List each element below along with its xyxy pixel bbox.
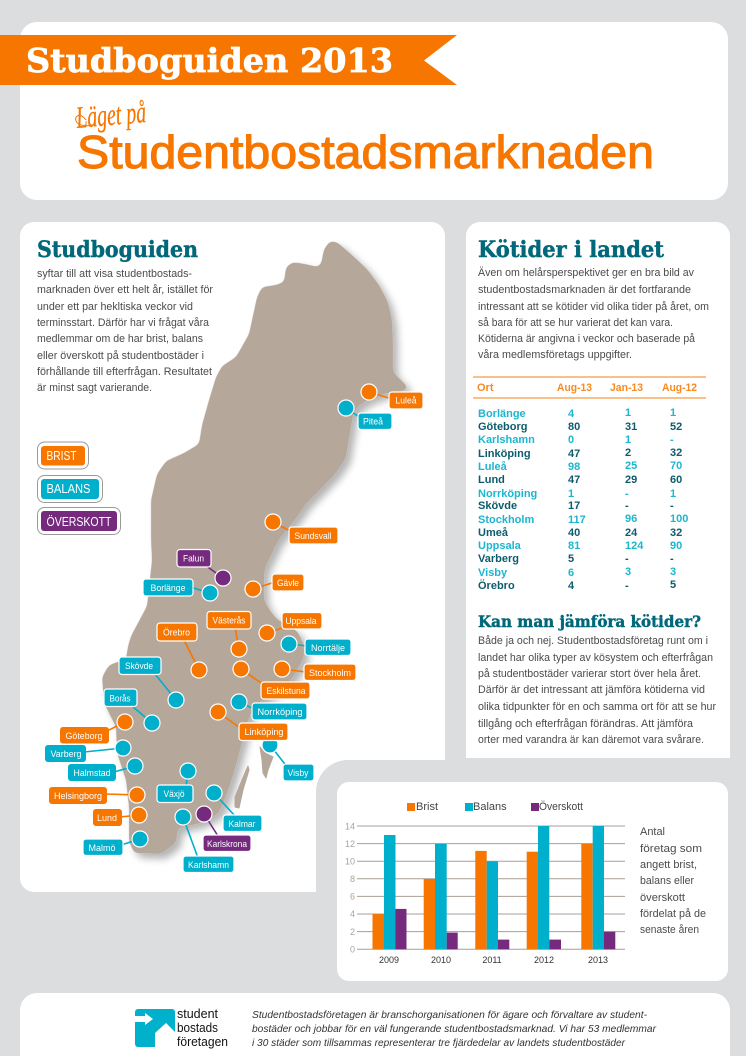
city: Helsingborg: Helsingborg — [54, 791, 102, 802]
footer text: bostäder och jobbar för en väl fungerande studentbostadsmarknad. Vi har 53 medlemmar — [252, 1023, 656, 1035]
city: Varberg — [45, 740, 131, 762]
row: Visby — [478, 566, 676, 579]
city: Västerås — [207, 612, 251, 657]
row: Linköping — [478, 447, 682, 460]
bars: 2013 — [581, 826, 615, 965]
city: Stockholm: Stockholm — [309, 668, 351, 679]
row: Umeå: 24 — [625, 527, 638, 539]
city: Gävle: Gävle — [277, 578, 299, 589]
intro text: Kötiderna är angivna i veckor och baserade på — [478, 333, 696, 345]
row: Karlshamn: - — [670, 434, 674, 446]
row: Lund: 29 — [625, 474, 637, 486]
bars: 2010: 2010 — [431, 955, 451, 965]
row: Varberg: Varberg — [478, 553, 519, 565]
row: Varberg: 5 — [568, 553, 574, 565]
chart caption: Antal — [640, 826, 665, 838]
row: Borlänge: 1 — [670, 407, 676, 419]
row: Visby: 6 — [568, 567, 574, 579]
bars: 2013: 2013 — [588, 955, 608, 965]
intro text: är minst sagt varierande. — [37, 382, 152, 394]
intro text: intressant att se kötider vid olika tider på året, om — [478, 301, 709, 313]
row: Stockholm: 96 — [625, 513, 637, 525]
city: Piteå — [338, 400, 392, 430]
row: Lund — [478, 474, 682, 486]
row: Norrköping: - — [625, 488, 629, 500]
city: Falun: Falun — [183, 554, 204, 564]
row: Umeå — [478, 527, 682, 539]
row: Karlshamn: 1 — [625, 434, 631, 446]
panel: chart — [316, 760, 746, 981]
legend: brist: BRIST — [46, 448, 77, 463]
row: Linköping: 2 — [625, 447, 631, 459]
y axis grid: 10 — [345, 856, 355, 866]
row: Varberg: - — [625, 553, 629, 565]
table header — [477, 382, 697, 394]
city: Linköping: Linköping — [244, 727, 284, 738]
row: Göteborg: Göteborg — [478, 421, 528, 433]
city: Halmstad: Halmstad — [74, 768, 110, 779]
row: Uppsala: 90 — [670, 540, 682, 552]
row: Luleå: 70 — [670, 460, 682, 472]
city: Karlshamn — [175, 809, 234, 872]
city: Skövde — [119, 657, 184, 708]
ribbon — [0, 35, 457, 85]
city: Borås — [104, 689, 160, 731]
comparison text: Därför är det intressant att jämföra kötiderna vid — [478, 684, 705, 696]
row: Umeå: 32 — [670, 527, 682, 539]
comparison text: landet har olika typer av kösystem och efterfrågan — [478, 652, 713, 664]
city: Norrtälje: Norrtälje — [311, 643, 345, 654]
intro text — [37, 268, 213, 394]
intro text: under ett par hekltiska veckor vid — [37, 301, 193, 313]
city: Växjö: Växjö — [164, 789, 184, 800]
heading: Studboguiden: Studboguiden — [37, 237, 198, 263]
chart caption: angett brist, — [640, 859, 697, 871]
legend — [38, 442, 120, 534]
row: Örebro: Örebro — [478, 579, 515, 592]
row: Karlshamn — [478, 434, 674, 446]
city: Lund: Lund — [97, 813, 117, 824]
queue time table — [473, 377, 706, 592]
city: Göteborg — [60, 714, 133, 744]
bars: 2011: 2011 — [482, 955, 502, 965]
city: Borlänge: Borlänge — [150, 583, 186, 594]
city: Kalmar: Kalmar — [228, 819, 256, 830]
row: Borlänge — [478, 407, 676, 420]
row: Lund: 60 — [670, 474, 682, 486]
panel: kötider — [466, 222, 730, 758]
row: Visby: 3 — [625, 566, 631, 578]
chart caption: överskott — [640, 892, 685, 904]
bars: 2009: 2009 — [379, 955, 399, 965]
city: Uppsala — [259, 612, 322, 641]
intro text: så bara för att se hur varierat det kan vara. — [478, 317, 673, 329]
city: Västerås: Västerås — [212, 616, 246, 626]
intro text: studentbostadsmarknaden är det fortfarande — [478, 284, 691, 296]
bars: 2011 — [475, 851, 509, 965]
ribbon title: Studboguiden 2013 — [26, 41, 393, 80]
row: Göteborg: 52 — [670, 421, 682, 433]
row: Norrköping: Norrköping — [478, 488, 537, 500]
chart legend — [407, 801, 583, 813]
intro text: marknaden över ett helt år, istället för — [37, 284, 213, 296]
row: Norrköping — [478, 488, 676, 500]
y axis grid: 2 — [350, 927, 355, 937]
row: Varberg: - — [670, 553, 674, 565]
y axis grid: 14 — [345, 822, 355, 832]
city: Lund — [93, 807, 147, 826]
row: Lund: Lund — [478, 474, 505, 486]
city: Borlänge — [143, 579, 218, 601]
logo text: företagen — [177, 1035, 228, 1049]
row: Borlänge: Borlänge — [478, 408, 526, 420]
y axis grid: 12 — [345, 839, 355, 849]
heading: Kan man jämföra kötider: Kan man jämföra kötider? — [478, 612, 701, 631]
row: Stockholm: 100 — [670, 513, 688, 525]
row: Lund: 47 — [568, 474, 580, 486]
city: Helsingborg — [49, 787, 145, 804]
intro text — [478, 267, 709, 361]
table header: Jan-13 — [610, 382, 643, 394]
y axis grid: 0 — [350, 944, 355, 954]
city: Visby — [262, 737, 314, 781]
script subtitle — [74, 94, 147, 135]
row: Umeå: 40 — [568, 527, 580, 539]
row: Visby: Visby — [478, 567, 508, 579]
comparison text: Både ja och nej. Studentbostadsföretag runt om i — [478, 635, 708, 647]
city: Karlskrona — [196, 806, 251, 852]
city: Skövde: Skövde — [125, 661, 153, 672]
row: Norrköping: 1 — [670, 488, 676, 500]
row: Karlshamn: Karlshamn — [478, 434, 535, 446]
y axis grid: 6 — [350, 892, 355, 902]
comparison text: på studentbostäder varierar stort över hela året. — [478, 668, 701, 680]
row: Borlänge: 1 — [625, 407, 631, 419]
row: Luleå: 98 — [568, 461, 580, 473]
row: Linköping: 32 — [670, 447, 682, 459]
city: Luleå: Luleå — [396, 396, 417, 406]
bars: 2010 — [424, 844, 458, 965]
row: Umeå: Umeå — [478, 527, 509, 539]
intro text: eller överskott på studentbostäder i — [37, 350, 204, 362]
city: Örebro — [157, 623, 207, 678]
chart caption: balans eller — [640, 875, 694, 887]
city: Göteborg: Göteborg — [66, 731, 102, 742]
city: Borås: Borås — [110, 694, 131, 704]
row: Linköping: 47 — [568, 448, 580, 460]
row: Uppsala: 124 — [625, 540, 644, 552]
row: Karlshamn: 0 — [568, 434, 574, 446]
city: Gävle — [245, 574, 304, 597]
legend: överskott: ÖVERSKOTT — [46, 514, 112, 529]
intro text: förhållande till efterfrågan. Resultatet — [37, 366, 212, 378]
city: Malmö: Malmö — [88, 843, 116, 854]
city: Eskilstuna: Eskilstuna — [266, 686, 306, 697]
panel: footer — [20, 993, 730, 1056]
city: Stockholm — [274, 661, 356, 680]
chart caption: företag som — [640, 843, 702, 855]
chart legend: Överskott — [539, 801, 583, 813]
row: Linköping: Linköping — [478, 448, 531, 460]
chart legend: Brist — [416, 801, 438, 813]
panel: header — [0, 22, 728, 200]
row: Visby: 3 — [670, 566, 676, 578]
row: Skövde: Skövde — [478, 500, 517, 512]
city: Norrköping — [231, 694, 307, 720]
city: Örebro: Örebro — [163, 628, 190, 638]
row: Luleå: 25 — [625, 460, 637, 472]
chart legend: Balans — [473, 801, 507, 813]
row: Luleå: Luleå — [478, 461, 508, 473]
legend: balans: BALANS — [46, 481, 91, 496]
panel: map — [20, 222, 445, 892]
intro text: syftar till att visa studentbostads- — [37, 268, 192, 280]
y axis grid: 4 — [350, 909, 355, 919]
row: Skövde: 17 — [568, 500, 580, 512]
intro text: terminsstart. Därför har vi frågat våra — [37, 317, 210, 329]
footer text: Studentbostadsföretagen är branschorganisationen för ägare och förvaltare av student- — [252, 1009, 647, 1021]
bars: 2012: 2012 — [534, 955, 554, 965]
chart caption: senaste åren — [640, 924, 699, 936]
row: Skövde: - — [625, 500, 629, 512]
y axis grid: 8 — [350, 874, 355, 884]
intro text: medlemmar om de har brist, balans — [37, 333, 203, 345]
city: Malmö — [83, 831, 148, 856]
script subtitle: Läget på — [74, 94, 147, 135]
y axis grid — [345, 822, 625, 954]
row: Luleå — [478, 460, 682, 473]
row: Stockholm: 117 — [568, 514, 586, 526]
city: Sundsvall — [265, 514, 338, 544]
main title: Studentbostadsmarknaden — [77, 126, 654, 178]
intro text: våra medlemsföretags uppgifter. — [478, 349, 632, 361]
row: Uppsala: 81 — [568, 540, 580, 552]
city: Falun — [177, 550, 231, 586]
table header: Ort — [477, 382, 494, 394]
row: Örebro — [478, 579, 676, 592]
row: Göteborg — [478, 421, 682, 433]
comparison text: orter med varandra är kan däremot vara svårare. — [478, 734, 704, 746]
bars: 2009 — [372, 835, 406, 965]
row: Örebro: 4 — [568, 580, 575, 592]
city: Norrtälje — [281, 636, 351, 656]
row: Örebro: 5 — [670, 579, 676, 591]
row: Borlänge: 4 — [568, 408, 575, 420]
logo text: student — [177, 1007, 219, 1021]
intro text: Även om helårsperspektivet ger en bra bild av — [478, 267, 694, 279]
city: Luleå — [361, 384, 423, 409]
footer text: i 30 städer som tillsammas representerar tre fjärdedelar av landets studentbostäder — [252, 1037, 625, 1049]
row: Örebro: - — [625, 580, 629, 592]
row: Norrköping: 1 — [568, 488, 574, 500]
city: Kalmar — [206, 785, 262, 832]
row: Göteborg: 31 — [625, 421, 637, 433]
row: Göteborg: 80 — [568, 421, 580, 433]
comparison text: olika tidpunkter för en och samma ort för att se hur — [478, 701, 716, 713]
chart caption: fördelat på de — [640, 908, 706, 920]
map of Sweden — [102, 241, 409, 854]
table header: Aug-13 — [557, 382, 592, 394]
row: Skövde: - — [670, 500, 674, 512]
city: Växjö — [157, 763, 196, 802]
row: Uppsala — [478, 540, 682, 552]
city: Varberg: Varberg — [50, 749, 82, 760]
chart caption — [640, 826, 706, 936]
logo icon — [135, 1009, 176, 1048]
city: Sundsvall: Sundsvall — [294, 531, 332, 542]
bars: 2012 — [527, 826, 561, 965]
row: Skövde — [478, 500, 674, 512]
city: Halmstad — [68, 758, 143, 781]
comparison text — [478, 635, 716, 746]
city: Norrköping: Norrköping — [258, 707, 302, 718]
city: Eskilstuna — [233, 661, 310, 699]
table header: Aug-12 — [662, 382, 697, 394]
city: Karlskrona: Karlskrona — [207, 839, 248, 850]
bar chart — [345, 822, 625, 965]
city: Linköping — [210, 704, 288, 740]
logo text — [177, 1007, 228, 1049]
heading: Kötider i landet: Kötider i landet — [478, 237, 665, 263]
city: Uppsala: Uppsala — [286, 616, 317, 627]
city: Karlshamn: Karlshamn — [188, 860, 229, 871]
city: Visby: Visby — [288, 768, 309, 779]
row: Varberg — [478, 553, 674, 565]
city: Piteå: Piteå — [363, 416, 384, 428]
row: Uppsala: Uppsala — [478, 540, 522, 552]
comparison text: tillgång och efterfrågan förändras. Att jämföra — [478, 718, 694, 730]
row: Stockholm: Stockholm — [478, 514, 534, 526]
row: Stockholm — [478, 513, 688, 526]
footer text — [252, 1009, 656, 1049]
logo text: bostads — [177, 1021, 218, 1035]
